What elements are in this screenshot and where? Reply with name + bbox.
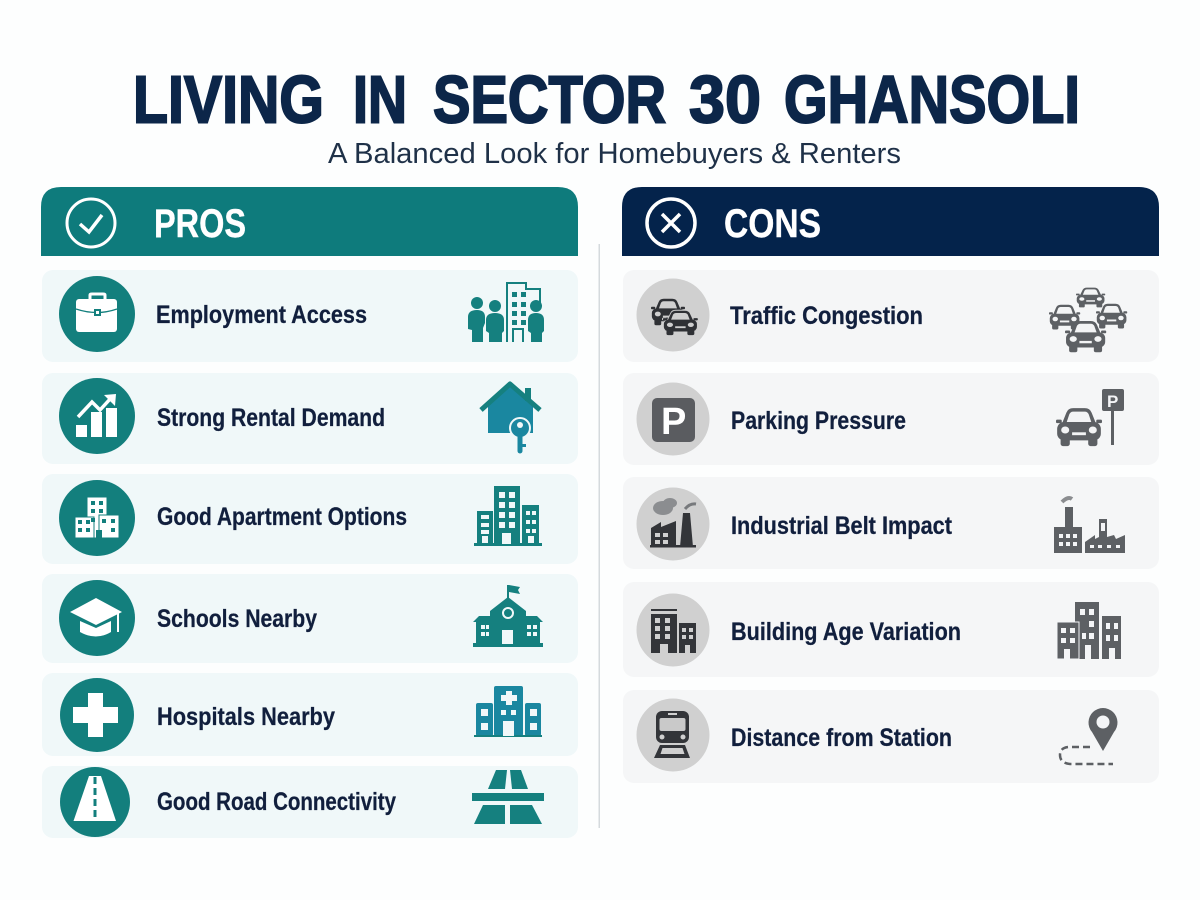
- row: parking pressure: [623, 373, 1159, 465]
- card: [623, 690, 1159, 783]
- icon: house with key: [481, 384, 540, 451]
- icon: road: [60, 767, 130, 837]
- card: [42, 270, 578, 362]
- row: employment access: [42, 270, 578, 362]
- label: Hospitals Nearby: [157, 703, 335, 731]
- icon: parking sign: [636, 382, 710, 456]
- icon: apartment blocks: [59, 480, 135, 556]
- row: industrial belt impact: [623, 477, 1159, 569]
- icon: parking sign: P: [661, 401, 686, 443]
- label: Industrial Belt Impact: [731, 512, 953, 540]
- label: Parking Pressure: [731, 407, 906, 435]
- pros header: [41, 187, 578, 256]
- row: schools nearby: [42, 574, 578, 663]
- label: Employment Access: [156, 301, 367, 329]
- row: hospitals nearby: [42, 673, 578, 756]
- icon: car and parking post: P: [1107, 392, 1118, 411]
- row: good road connectivity: [42, 766, 578, 838]
- icon: growth chart: [59, 378, 135, 454]
- panel: cons: [622, 187, 1159, 783]
- label: Schools Nearby: [157, 605, 317, 633]
- label: Good Apartment Options: [157, 503, 407, 531]
- icon: medical cross: [60, 678, 134, 752]
- card: [42, 373, 578, 464]
- title: 30: [689, 62, 761, 138]
- card: [623, 270, 1159, 362]
- title: SECTOR: [433, 62, 666, 138]
- icon: train: [636, 698, 710, 772]
- title: IN: [353, 62, 407, 138]
- label: Distance from Station: [731, 724, 952, 752]
- icon: x circle: [647, 199, 695, 247]
- icon: highway: [472, 770, 544, 824]
- card: [42, 766, 578, 838]
- row: traffic congestion: [623, 270, 1159, 362]
- icon: people and office: [468, 283, 544, 342]
- card: [623, 582, 1159, 677]
- card: [623, 373, 1159, 465]
- icon: car and parking post: [1056, 389, 1124, 446]
- icon: briefcase: [59, 276, 135, 352]
- cons header: [622, 187, 1159, 256]
- label: Traffic Congestion: [730, 302, 923, 330]
- icon: mixed buildings: [1057, 602, 1121, 659]
- icon: apartment building: [474, 486, 542, 546]
- subtitle: A Balanced Look for Homebuyers & Renters: [328, 138, 901, 170]
- icon: map pin with dashed route: [1060, 708, 1118, 764]
- row: strong rental demand: [42, 373, 578, 464]
- pros heading: PROS: [154, 202, 246, 246]
- icon: two cars: [636, 278, 710, 352]
- icon: check circle: [67, 199, 115, 247]
- row: good apartment options: [42, 474, 578, 564]
- card: [42, 673, 578, 756]
- icon: school building: [473, 585, 543, 647]
- row: building age variation: [623, 582, 1159, 677]
- label: Strong Rental Demand: [157, 404, 385, 432]
- card: [42, 474, 578, 564]
- icon: industrial skyline: [1054, 498, 1125, 553]
- panel: pros: [41, 187, 578, 838]
- icon: graduation cap: [59, 580, 135, 656]
- label: Good Road Connectivity: [157, 788, 396, 816]
- icon: hospital building: [474, 686, 542, 737]
- title: GHANSOLI: [784, 62, 1080, 138]
- icon: factory with smoke: [636, 488, 710, 560]
- card: [42, 574, 578, 663]
- title: LIVING: [133, 62, 324, 138]
- icon: traffic jam: [1049, 288, 1127, 352]
- row: distance from station: [623, 690, 1159, 783]
- column divider: [598, 244, 600, 828]
- label: Building Age Variation: [731, 618, 961, 646]
- card: [623, 477, 1159, 569]
- cons heading: CONS: [724, 202, 821, 246]
- icon: old buildings: [636, 594, 710, 666]
